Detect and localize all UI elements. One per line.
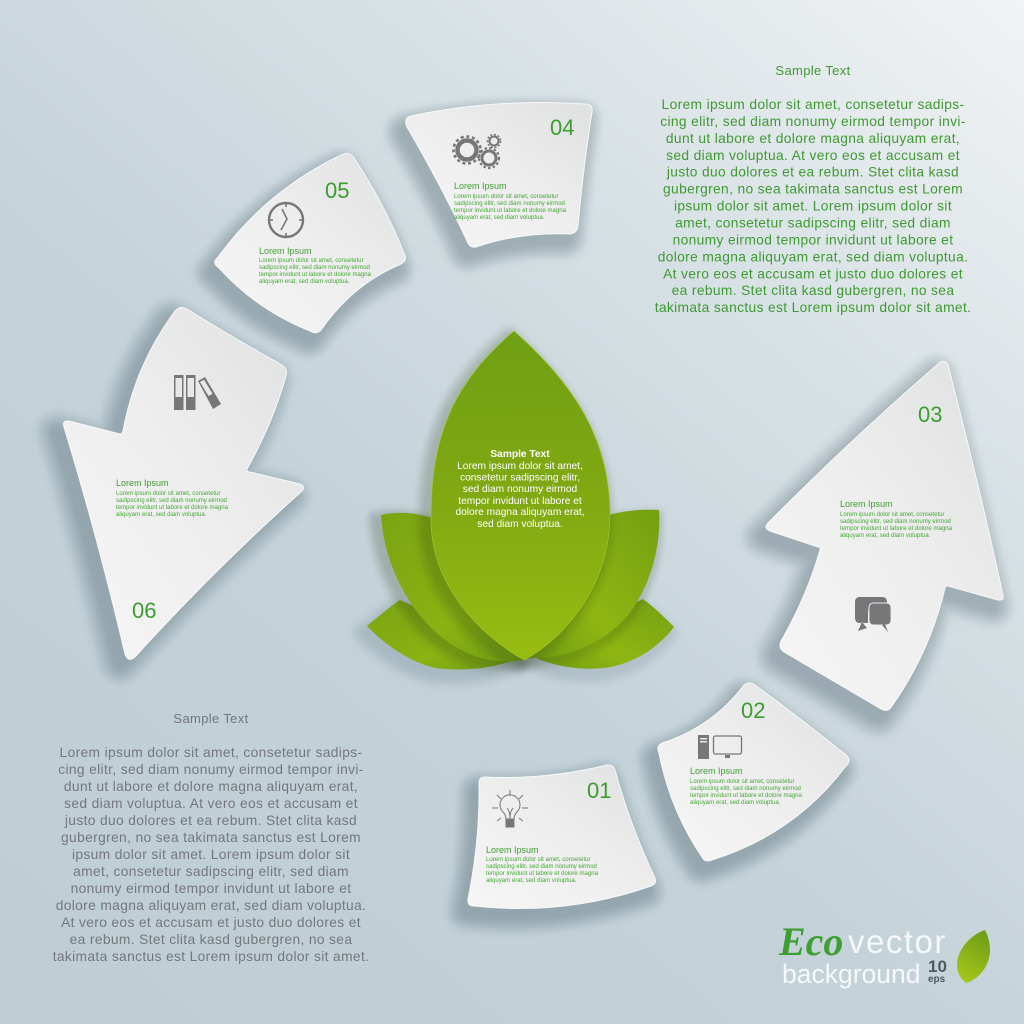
text: centre leaf: consetetur sadipscing elitr, — [460, 472, 580, 484]
text: centre leaf: Sample Text — [490, 449, 550, 460]
text block: bottom left: cing elitr, sed diam nonumy eirmod tempor invi- — [58, 762, 364, 777]
text block: bottom left: dunt ut labore et dolore magna aliquyam erat, — [64, 779, 358, 794]
text: step 03 — [840, 499, 953, 539]
text block: top right: Lorem ipsum dolor sit amet, consetetur sadips- — [662, 97, 964, 112]
text: step 04: aliquyam erat, sed diam voluptua. — [454, 215, 545, 221]
text block: bottom left — [53, 711, 369, 964]
text: step 02: Lorem Ipsum — [690, 766, 743, 776]
text: centre leaf: tempor invidunt ut labore et — [458, 496, 582, 507]
number 06: 06 — [132, 598, 156, 623]
panel: step 04 gears — [400, 102, 592, 257]
text block: top right: dunt ut labore et dolore magna aliquyam erat, — [666, 131, 960, 146]
text: step 04: Lorem ipsum dolor sit amet, consetetur — [454, 194, 559, 200]
icon: gears — [454, 134, 500, 168]
central leaf — [362, 331, 674, 676]
logo: eco vector background: Eco — [778, 919, 843, 964]
icon: leaf — [957, 930, 990, 983]
text block: top right: gubergren, no sea takimata sanctus est Lorem — [663, 182, 963, 196]
panel: step 01 bulb — [462, 765, 656, 918]
leaf: middle left — [375, 513, 525, 665]
number 02: 02 — [741, 698, 765, 723]
leaf: outer left — [362, 600, 525, 676]
icon: light bulb — [492, 790, 528, 827]
text block: top right: sed diam voluptua. At vero eos et accusam et — [666, 148, 960, 163]
text: step 05: aliquyam erat, sed diam voluptua. — [259, 279, 350, 285]
number 01: 01 — [587, 778, 611, 803]
text block: bottom left: gubergren, no sea takimata sanctus est Lorem — [61, 830, 361, 845]
text: step 01: Lorem ipsum dolor sit amet, consetetur — [486, 857, 591, 863]
number 03: 03 — [918, 402, 942, 427]
text: centre leaf — [455, 449, 585, 530]
text: step 03: aliquyam erat, sed diam voluptua. — [840, 533, 931, 539]
text block: bottom left: Sample Text — [173, 711, 249, 726]
text block: top right: ea rebum. Stet clita kasd gubergren, no sea — [672, 283, 954, 298]
number 05: 05 — [325, 178, 349, 203]
text: step 06: aliquyam erat, sed diam voluptua. — [116, 512, 207, 518]
text: step 02: sadipscing elitr, sed diam nonumy eirmod — [690, 786, 801, 792]
panel: step 03 arrow — [759, 361, 1003, 720]
text block: bottom left: ipsum dolor sit amet. Lorem ipsum dolor sit — [72, 847, 350, 862]
text block: top right: ipsum dolor sit amet. Lorem ipsum dolor sit — [674, 198, 952, 214]
text: step 02 — [690, 766, 803, 806]
text block: top right: amet, consetetur sadipscing elitr, sed diam — [675, 216, 951, 230]
text: step 05: sadipscing elitr, sed diam nonumy eirmod — [259, 265, 370, 271]
text: step 02: Lorem ipsum dolor sit amet, consetetur — [690, 779, 795, 785]
panel: step 02 computer — [652, 683, 849, 871]
text: step 01: aliquyam erat, sed diam voluptua. — [486, 878, 577, 884]
text: step 06: sadipscing elitr, sed diam nonumy eirmod — [116, 498, 227, 504]
text: centre leaf: sed diam nonumy eirmod — [463, 484, 578, 495]
panel: step 05 clock — [209, 154, 405, 343]
text block: top right — [655, 63, 971, 315]
icon: binders — [174, 375, 221, 410]
text: step 06: tempor invidunt ut labore et dolore magna — [116, 505, 229, 511]
logo: eco vector background — [778, 919, 990, 989]
logo: eco vector background: vector — [848, 923, 947, 960]
leaf: middle right — [524, 510, 659, 663]
text block: bottom left: justo duo dolores et ea rebum. Stet clita kasd — [64, 813, 357, 828]
text: centre leaf: sed diam voluptua. — [477, 519, 563, 530]
text block: bottom left: sed diam voluptua. At vero eos et accusam et — [64, 796, 358, 811]
text: centre leaf: Lorem ipsum dolor sit amet, — [457, 461, 583, 472]
text block: top right: At vero eos et accusam et justo duo dolores et — [663, 266, 963, 282]
text block: top right: justo duo dolores et ea rebum. Stet clita kasd — [666, 164, 959, 180]
leaf: centre — [426, 331, 610, 665]
text block: bottom left: Lorem ipsum dolor sit amet, consetetur sadips- — [60, 745, 362, 760]
icon: computer — [698, 735, 742, 759]
text block: top right: takimata sanctus est Lorem ipsum dolor sit amet. — [655, 300, 971, 315]
text block: bottom left: takimata sanctus est Lorem ipsum dolor sit amet. — [53, 949, 369, 964]
text: step 04: tempor invidunt ut labore et dolore magna — [454, 208, 567, 214]
text: step 05: Lorem Ipsum — [259, 246, 312, 256]
text: step 05 — [259, 246, 372, 285]
text: step 01: tempor invidunt ut labore et dolore magna — [486, 871, 599, 877]
text block: top right: nonumy eirmod tempor invidunt ut labore et — [673, 232, 953, 248]
text: step 02: aliquyam erat, sed diam voluptua. — [690, 800, 781, 806]
text: step 03: Lorem ipsum dolor sit amet, consetetur — [840, 512, 945, 518]
text: step 06: Lorem Ipsum — [116, 478, 169, 488]
text: step 06 — [116, 478, 229, 518]
logo: eco vector background: background — [782, 959, 920, 989]
text block: top right: cing elitr, sed diam nonumy eirmod tempor invi- — [660, 114, 966, 129]
text block: bottom left: nonumy eirmod tempor invidunt ut labore et — [71, 881, 351, 896]
icon: clock — [269, 203, 303, 237]
text: step 03: tempor invidunt ut labore et dolore magna — [840, 526, 953, 532]
text: step 04: sadipscing elitr, sed diam nonumy eirmod — [454, 201, 565, 207]
text block: bottom left: At vero eos et accusam et justo duo dolores et — [61, 915, 361, 930]
text block: top right: Sample Text — [775, 63, 851, 78]
text: step 01 — [486, 845, 599, 884]
text: step 05: tempor invidunt ut labore et dolore magna — [259, 272, 372, 278]
text: step 03: Lorem Ipsum — [840, 499, 893, 509]
text block: bottom left: amet, consetetur sadipscing elitr, sed diam — [73, 864, 349, 879]
text: step 01: Lorem Ipsum — [486, 845, 539, 855]
leaf: outer right — [527, 599, 674, 676]
text: step 05: Lorem ipsum dolor sit amet, consetetur — [259, 258, 364, 264]
text: step 04: Lorem Ipsum — [454, 181, 507, 191]
text block: bottom left: ea rebum. Stet clita kasd gubergren, no sea — [70, 932, 352, 947]
text: step 03: sadipscing elitr, sed diam nonumy eirmod — [840, 519, 951, 525]
text: centre leaf: dolore magna aliquyam erat, — [455, 507, 585, 518]
logo: eco vector background: eps — [928, 974, 946, 985]
text block: bottom left: dolore magna aliquyam erat, sed diam voluptua. — [56, 898, 366, 913]
text: step 02: tempor invidunt ut labore et dolore magna — [690, 793, 803, 799]
logo: eco vector background: 10 — [928, 957, 947, 976]
panel: step 06 arrow — [54, 307, 304, 667]
text: step 06: Lorem ipsum dolor sit amet, consetetur — [116, 491, 221, 497]
number 04: 04 — [550, 115, 574, 140]
text block: top right: dolore magna aliquyam erat, sed diam voluptua. — [658, 250, 968, 264]
text: step 04 — [454, 181, 567, 221]
icon: speech bubbles — [855, 597, 891, 632]
text: step 01: sadipscing elitr, sed diam nonumy eirmod — [486, 864, 597, 870]
